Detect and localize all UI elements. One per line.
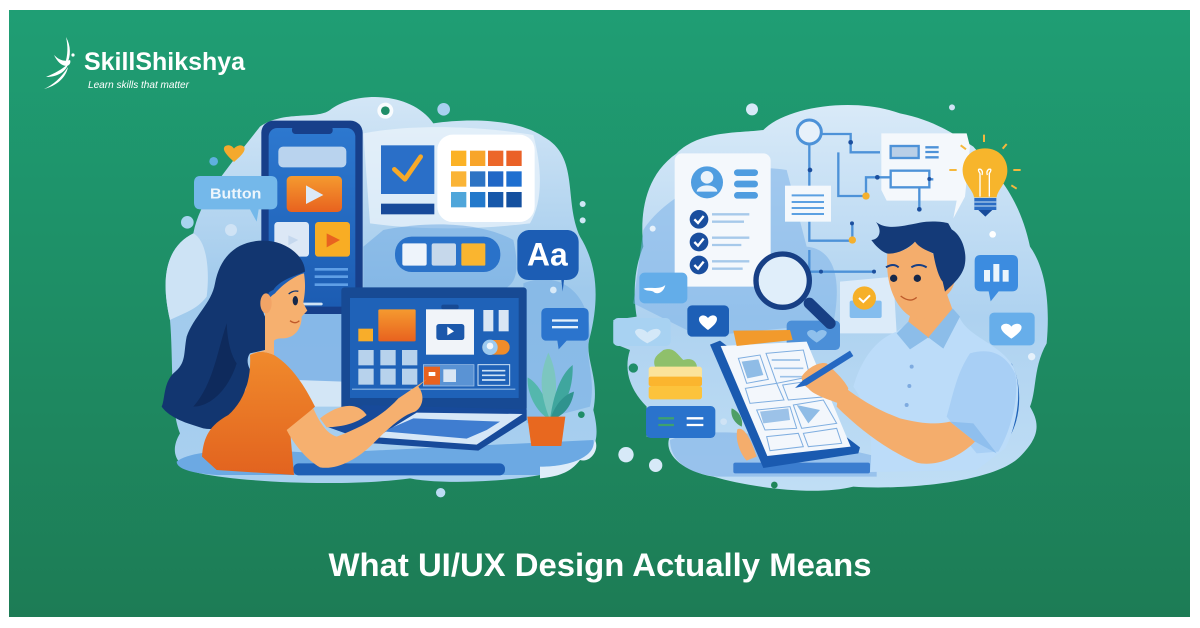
wireframe card top right: [881, 133, 970, 218]
video panel: [426, 309, 474, 355]
decorative dots: [618, 103, 1035, 488]
neck: [908, 293, 953, 338]
drawing hand: [802, 363, 848, 405]
phone: [261, 121, 363, 314]
video card white: [274, 222, 309, 257]
bar chart bubble: [975, 255, 1018, 301]
man: [837, 222, 1019, 472]
far hand: [320, 406, 367, 427]
collar: [897, 308, 960, 349]
logo wordmark: SkillShikshya: [84, 48, 246, 76]
woman: [162, 241, 427, 475]
chat bubble: photo: [639, 273, 687, 303]
face and neck: [250, 273, 307, 355]
sleeve cuff: [950, 422, 997, 453]
toggle: [482, 340, 510, 355]
base bar: [733, 463, 870, 473]
pen: [795, 351, 853, 388]
button label: Button: [210, 187, 261, 203]
writing arm: [837, 383, 975, 464]
check badge card: [840, 277, 897, 333]
hair: [871, 222, 965, 292]
lower wash: [670, 432, 877, 477]
eye: [293, 296, 298, 305]
eyes: [890, 275, 897, 282]
title: What UI/UX Design Actually Means: [328, 547, 872, 583]
soft background washes: [166, 127, 596, 478]
checkbox card: [381, 145, 434, 214]
illustration: UI design, woman at laptop: [162, 97, 597, 497]
video card yellow: [315, 222, 350, 257]
shirt: [202, 352, 315, 475]
profile checklist card: [675, 153, 771, 287]
icon: heart: [224, 145, 245, 162]
chat bubble: heart mid: [787, 321, 840, 350]
shirt buttons: [905, 365, 914, 407]
note card: [785, 186, 831, 222]
chat bubble: heart dark: [687, 305, 729, 337]
decorative dots: [181, 103, 586, 497]
head: [887, 242, 955, 319]
typography badge: Aa: [527, 236, 568, 272]
sleeve: [947, 351, 1016, 453]
ear: [260, 293, 272, 313]
colour palette card: [437, 135, 535, 222]
video card orange: [287, 176, 342, 212]
laptop: [327, 287, 527, 451]
pointing arm: [287, 379, 427, 468]
floor shadow: [177, 440, 594, 475]
holding hand: [737, 429, 757, 461]
typography badge: [517, 230, 579, 292]
backpack shadow: [973, 363, 1019, 453]
leaf behind clipboard: [731, 408, 742, 427]
background blob: [613, 105, 1048, 491]
logo: SkillShikshya: [44, 37, 246, 91]
clipboard: [710, 330, 860, 468]
component pill: [395, 237, 500, 272]
chat bubble: heart pale: [613, 318, 671, 346]
logo tagline: Learn skills that matter: [88, 79, 189, 91]
keyboard base: [327, 405, 527, 451]
button label: [194, 176, 277, 222]
speech bubble: [541, 308, 589, 349]
shirt: [853, 313, 1018, 472]
icon: logo figure: [44, 37, 75, 89]
plant: [527, 353, 574, 446]
list bubble: [646, 406, 715, 438]
stacked items icon: [649, 349, 702, 399]
illustration: UX design, man sketching wireframes: [613, 103, 1048, 491]
magnifier: [756, 254, 830, 323]
background blob: [166, 97, 597, 483]
flow diagram: [797, 120, 939, 272]
hair back: [162, 241, 305, 429]
icon: light bulb: [949, 135, 1021, 217]
heart bubble right: [989, 313, 1035, 345]
